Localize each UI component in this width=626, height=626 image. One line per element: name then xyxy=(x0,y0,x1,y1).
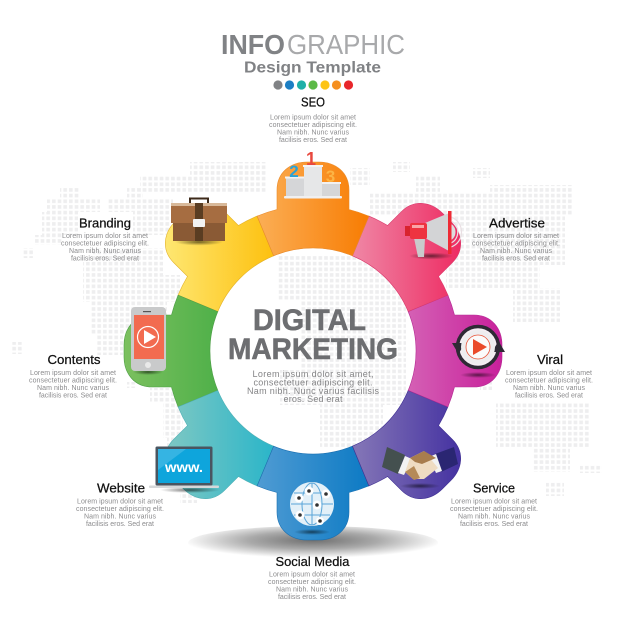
label: Service xyxy=(450,480,538,528)
segment: Social Media blue xyxy=(257,446,369,540)
label: Service: Nam nibh. Nunc varius xyxy=(458,514,530,520)
centre text block: Lorem ipsum dolor sit amet, xyxy=(252,369,374,379)
label: Advertise: facilisis eros. Sed erat xyxy=(482,256,550,262)
label: Branding: Branding xyxy=(79,216,131,230)
segment: Website teal xyxy=(140,379,285,524)
label: Social Media: Lorem ipsum dolor sit amet xyxy=(269,572,355,578)
centre heading: Digital Marketing xyxy=(228,304,398,366)
label: Contents: Lorem ipsum dolor sit amet xyxy=(30,370,116,377)
label: Social Media: facilisis eros. Sed erat xyxy=(278,594,346,601)
label: Contents: Contents xyxy=(48,352,101,367)
label: Website: consectetuer adipiscing elit. xyxy=(76,506,164,513)
label: Contents: facilisis eros. Sed erat xyxy=(39,392,107,400)
segment: Service purple xyxy=(341,379,486,524)
icon: briefcase xyxy=(171,198,227,246)
label: Social Media xyxy=(268,554,356,601)
segment: SEO orange xyxy=(257,162,369,256)
label: Website: Nam nibh. Nunc varius xyxy=(84,514,156,520)
icon: podium: 2 xyxy=(289,162,299,181)
label: Advertise: Advertise xyxy=(489,216,545,230)
label: Viral: Lorem ipsum dolor sit amet xyxy=(506,370,592,377)
segment: Advertise pink xyxy=(341,178,486,323)
label: SEO xyxy=(269,94,357,144)
label: Branding: consectetuer adipiscing elit. xyxy=(61,240,149,248)
title: Infographic Design Template: GRAPHIC xyxy=(287,29,405,60)
label: Advertise: Lorem ipsum dolor sit amet xyxy=(473,233,559,240)
title: Infographic Design Template: Design Template xyxy=(244,60,381,76)
label: Social Media: Nam nibh. Nunc varius xyxy=(276,586,348,594)
label: Branding: Lorem ipsum dolor sit amet xyxy=(62,233,148,240)
icon: smartphone play xyxy=(131,307,166,375)
ground shadow xyxy=(188,526,438,560)
title: Infographic Design Template xyxy=(221,29,405,76)
centre text block: eros. Sed erat xyxy=(284,394,343,404)
label: Social Media: Social Media xyxy=(276,554,350,569)
label: Viral: Viral xyxy=(537,352,563,367)
label: Website xyxy=(76,480,164,528)
segment: Branding yellow xyxy=(140,178,285,323)
label: Advertise xyxy=(472,216,560,262)
label: SEO: Lorem ipsum dolor sit amet xyxy=(270,114,356,122)
label: Service: Lorem ipsum dolor sit amet xyxy=(451,498,537,506)
icon: podium: 1 xyxy=(306,149,316,169)
centre heading: Digital Marketing: MARKETING xyxy=(228,333,398,366)
icon: megaphone xyxy=(405,211,462,260)
label: Branding: facilisis eros. Sed erat xyxy=(71,256,139,262)
title: Infographic Design Template: INFO xyxy=(221,29,285,60)
label: Website: facilisis eros. Sed erat xyxy=(86,521,154,528)
icon: handshake xyxy=(382,447,458,489)
segment: Contents green xyxy=(124,295,218,407)
label: Branding: Nam nibh. Nunc varius xyxy=(69,248,142,255)
label: Website: Website xyxy=(97,480,145,496)
centre text block: Nam nibh. Nunc varius facilisis xyxy=(247,386,380,396)
icon: viral play loop xyxy=(452,326,505,378)
icon: laptop www xyxy=(149,446,220,493)
label: Contents: consectetuer adipiscing elit. xyxy=(29,378,117,384)
label: Contents xyxy=(29,352,117,400)
label: SEO: Nam nibh. Nunc varius xyxy=(277,130,350,136)
label: Branding xyxy=(61,216,149,262)
centre text block xyxy=(247,369,380,404)
label: Website: Lorem ipsum dolor sit amet xyxy=(77,498,163,506)
segment: Viral magenta xyxy=(408,295,502,407)
icon: globe network xyxy=(290,482,334,535)
label: Advertise: consectetuer adipiscing elit. xyxy=(472,240,560,248)
label: Service: facilisis eros. Sed erat xyxy=(460,521,528,528)
label: Contents: Nam nibh. Nunc varius xyxy=(37,385,110,392)
label: Advertise: Nam nibh. Nunc varius xyxy=(480,248,552,255)
centre heading: Digital Marketing: DIGITAL xyxy=(253,304,366,337)
label: Service: consectetuer adipiscing elit. xyxy=(450,506,538,513)
icon: podium: 3 xyxy=(326,167,335,186)
gear wheel xyxy=(124,162,502,540)
label: Service: Service xyxy=(473,480,515,496)
label: SEO: SEO xyxy=(301,94,325,110)
label: Viral xyxy=(505,352,593,400)
colour dots row xyxy=(273,80,353,90)
background dotted world map xyxy=(12,162,602,503)
label: SEO: facilisis eros. Sed erat xyxy=(279,137,347,144)
label: Viral: consectetuer adipiscing elit. xyxy=(505,378,593,384)
label: Viral: facilisis eros. Sed erat xyxy=(515,392,583,400)
icon: laptop www: www. xyxy=(164,459,203,475)
centre text block: consectetuer adipiscing elit. xyxy=(254,378,372,388)
label: Social Media: consectetuer adipiscing elit. xyxy=(268,579,356,586)
icon: podium xyxy=(284,149,342,198)
label: Viral: Nam nibh. Nunc varius xyxy=(513,385,586,392)
label: SEO: consectetuer adipiscing elit. xyxy=(269,122,357,129)
